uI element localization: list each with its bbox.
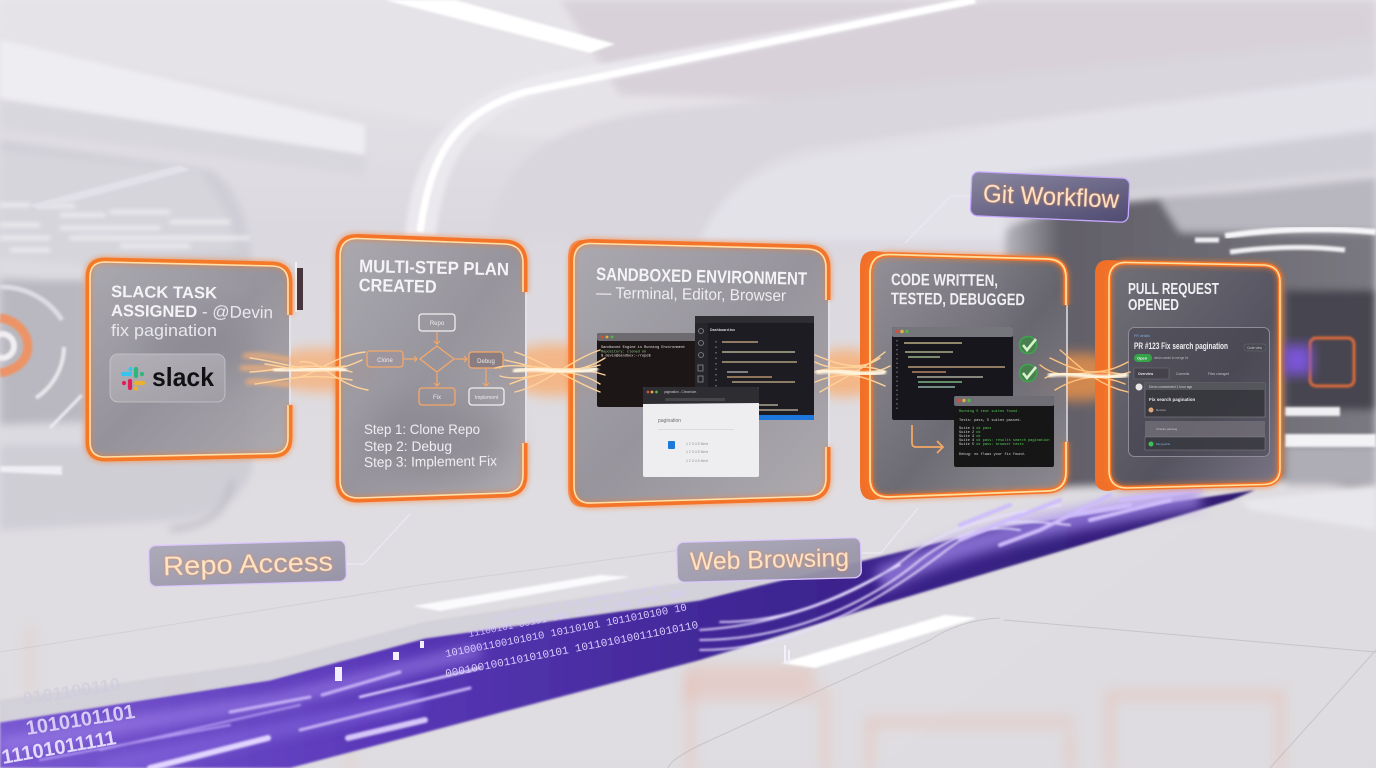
pull request card: Open — [1137, 356, 1148, 360]
panel 2: multi-step plan — [338, 236, 526, 500]
heading line 2: - @Devin — [197, 302, 273, 322]
browser window: 1 2 3 4 5 Next — [686, 459, 708, 463]
light streaks — [40, 490, 1200, 768]
step list — [364, 421, 497, 470]
flowchart: Implement — [475, 395, 499, 401]
panel 5: pull request opened — [1095, 260, 1280, 491]
pull request card: Devin commented 1 hour ago — [1149, 385, 1192, 389]
browser window: 1 2 3 4 5 Next — [686, 450, 708, 454]
binary text on the band: 1010001100101010 10110101 1011010100 10 — [444, 602, 688, 661]
floor tile outlines — [668, 618, 1376, 768]
pull request card — [1128, 328, 1270, 456]
pull request card: Fix search pagination — [1149, 397, 1196, 402]
test terminal window: Suite 1 ok pass — [959, 426, 991, 431]
beam: code to pull request — [1040, 350, 1130, 392]
flowchart — [367, 314, 504, 405]
heading: sandboxed environment: SANDBOXED ENVIRONMENT — [596, 264, 807, 289]
energy beam glows — [265, 344, 1128, 401]
binary text on the band: 0001001001101010101 1011010100111010110 — [444, 620, 699, 681]
terminal window — [597, 333, 697, 407]
callout: Web Browsing: Web Browsing — [690, 544, 849, 576]
browser window: pagination - Chromium — [664, 390, 697, 394]
heading line 2: ASSIGNED — [111, 302, 197, 321]
test terminal window: Running 5 test suites found. — [959, 409, 1019, 414]
terminal window: $ devin@sandbox:~/repo$ — [601, 354, 651, 358]
heading: pull request opened: OPENED — [1128, 297, 1179, 314]
editor window: Dashboard.tsx — [710, 328, 735, 332]
test terminal window: Suite 2 ok — [959, 430, 981, 435]
heading: code written, tested, debugged: TESTED, DEBUGGED — [891, 290, 1025, 309]
pull request card: Mergeable — [1156, 442, 1171, 446]
icon: check mark 2 — [1020, 364, 1036, 382]
pull request card: Checks passing — [1156, 427, 1178, 431]
band glow texture — [0, 497, 1200, 768]
arrow: code to tests — [912, 425, 943, 453]
callout: Web Browsing — [677, 508, 918, 582]
pull request card: PR details — [1134, 334, 1150, 338]
editor window — [695, 316, 814, 420]
binary text on the band: 0101100110 — [21, 674, 122, 709]
binary text on the band: 11100101 00101 001 1101 01101 0101 1010 — [467, 587, 688, 640]
test terminal window: Suite 5 ok pass: browser tests — [959, 442, 1024, 447]
terminal window: Repository: cloned ok — [601, 350, 646, 354]
floor lights — [413, 575, 977, 668]
test terminal window: Suite 4 ok pass: results search pagination — [959, 438, 1050, 443]
icon: slack logo — [123, 369, 143, 389]
panel 4: code written, tested, debugged — [860, 251, 1067, 500]
test terminal window: Debug: no flaws your fix found. — [959, 452, 1026, 457]
terminal window: Sandboxed Engine is Running Environment — [601, 345, 685, 350]
pull request card: Files changed — [1208, 372, 1229, 376]
subheading: tools: — Terminal, Editor, Browser — [596, 285, 787, 305]
icon: left wall gauge — [0, 287, 82, 428]
step list: Step 2: Debug — [364, 438, 452, 454]
browser window: pagination — [658, 418, 681, 424]
callout: Git Workflow — [905, 172, 1130, 243]
flowchart: Clone — [377, 358, 393, 364]
pull request card: Overview — [1138, 372, 1153, 376]
beam: sandbox to code — [815, 352, 890, 392]
callout: Git Workflow: Git Workflow — [982, 180, 1120, 214]
step list: Step 1: Clone Repo — [364, 421, 480, 437]
test terminal window: Tests: pass, 5 suites passed. — [959, 418, 1022, 423]
slack wordmark: slack — [152, 362, 215, 392]
heading: multi-step plan created: CREATED — [358, 275, 437, 297]
pull request card: Review — [1156, 408, 1167, 412]
heading: pull request opened: PULL REQUEST — [1128, 281, 1219, 298]
panel 1: Slack task assigned — [88, 260, 290, 459]
beam: slack to plan — [242, 352, 368, 390]
binary text on the band: 1010101101 — [24, 701, 137, 740]
pull request card: Code view — [1247, 346, 1263, 350]
icon: check mark 1 — [1020, 336, 1036, 354]
slack logo chip — [110, 354, 225, 402]
binary text on the band: 11101011111 — [0, 727, 118, 768]
heading: code written, tested, debugged: CODE WRITTEN, — [891, 271, 998, 290]
test terminal window: Suite 3 ok — [959, 434, 981, 439]
flowchart: Repo — [430, 321, 445, 327]
pull request card: Commits — [1176, 372, 1190, 376]
beam: plan to sandbox — [495, 350, 605, 392]
floor reflections — [30, 630, 1280, 768]
callout: Repo Access: Repo Access — [163, 547, 333, 581]
heading: multi-step plan created: MULTI-STEP PLAN — [359, 256, 509, 279]
pull request card: PR #123 Fix search pagination — [1134, 341, 1228, 352]
browser window — [643, 387, 759, 477]
binary text on the band: 101100101100101 010 0100101 10110 01 1 — [490, 581, 671, 625]
callout: Repo Access — [148, 514, 410, 587]
step list: Step 3: Implement Fix — [364, 453, 497, 470]
energy beams connecting panels (front) — [242, 350, 1130, 392]
panel 3: sandboxed environment — [568, 240, 829, 507]
task text: fix pagination — [111, 321, 217, 340]
flowchart: Debug — [477, 359, 495, 365]
test terminal window — [954, 396, 1054, 467]
code window — [892, 327, 1013, 420]
flowchart: Fix — [433, 395, 441, 401]
binary text on the band — [0, 581, 699, 768]
data stream: purple glowing band on the floor — [0, 490, 1255, 768]
browser window: 1 2 3 4 5 Next — [686, 442, 708, 446]
dark opening — [1005, 180, 1376, 490]
pull request card: devin wants to merge fix — [1154, 356, 1189, 360]
heading: Slack task assigned: SLACK TASK — [111, 283, 217, 302]
